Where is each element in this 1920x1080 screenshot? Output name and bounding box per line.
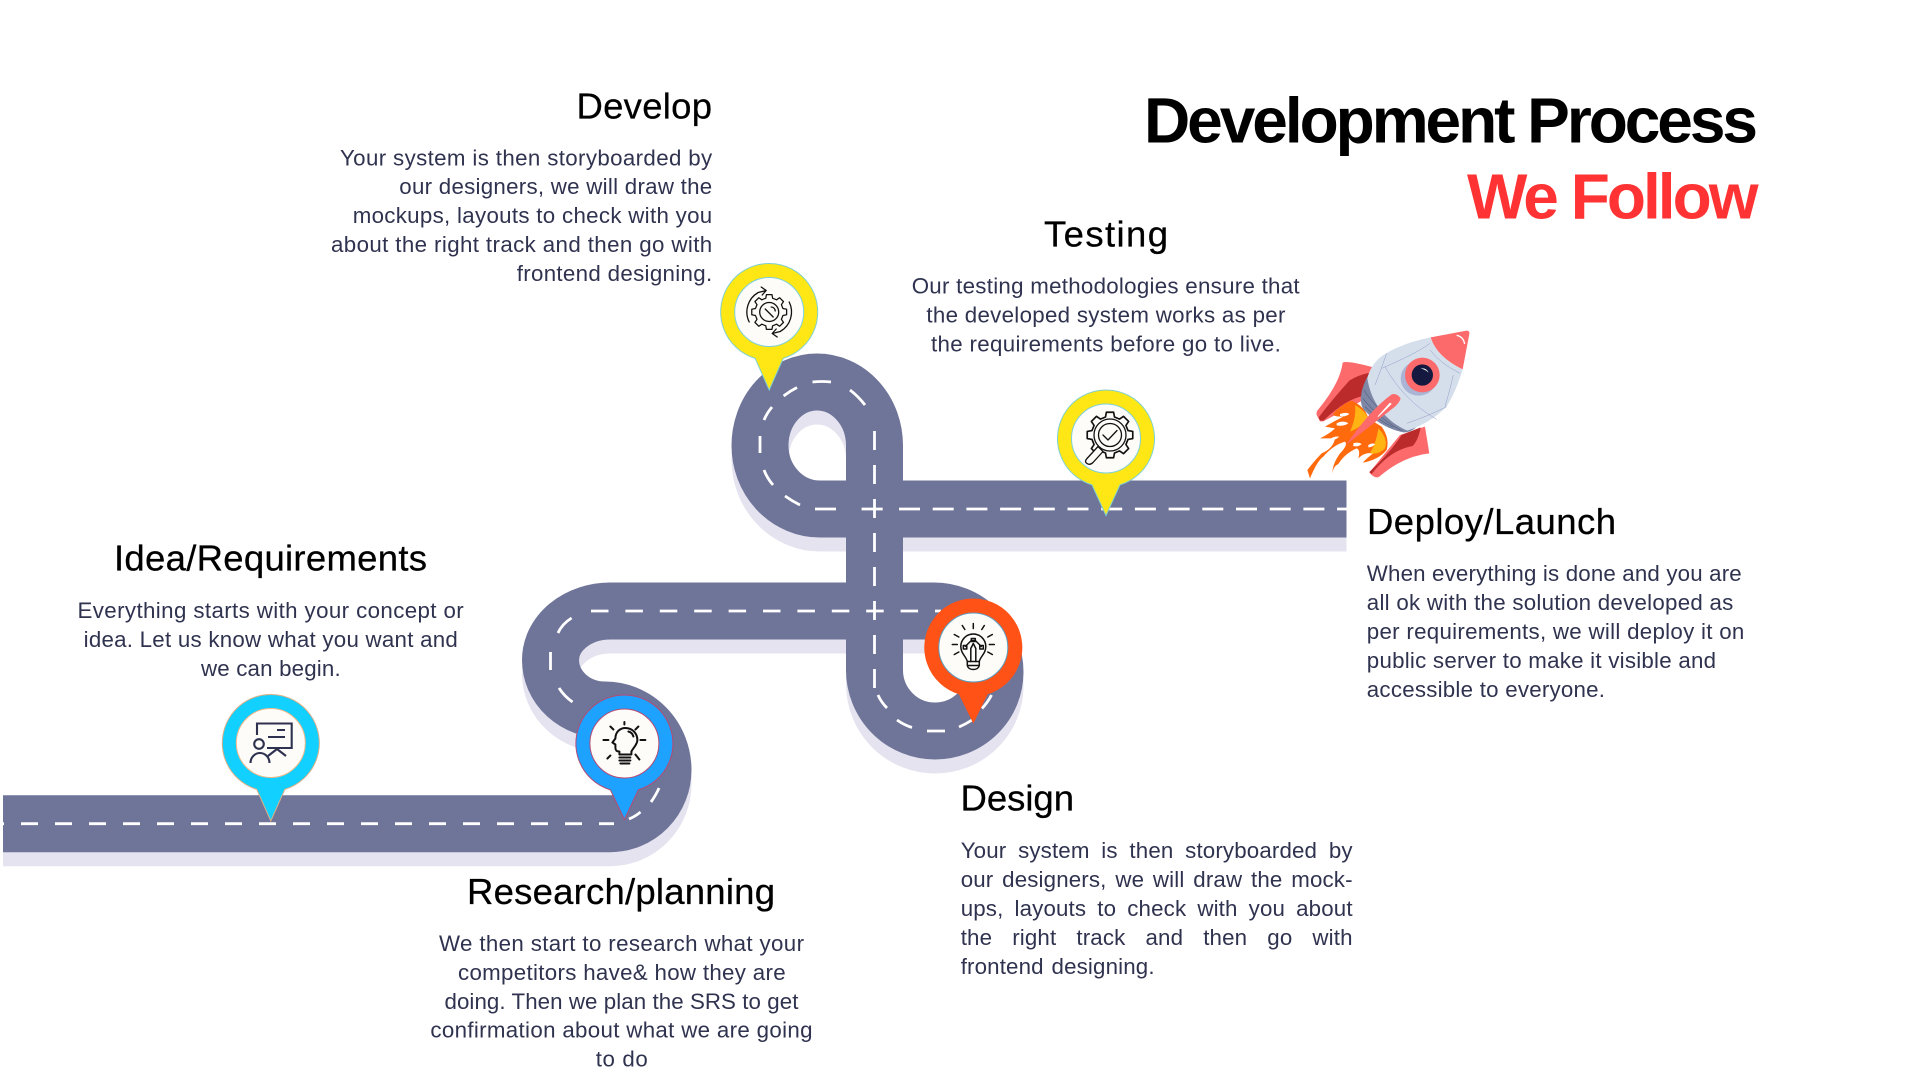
- pin: Testing: [1058, 390, 1154, 516]
- text block: Deploy/Launch: accessible to everyone.: [1367, 677, 1605, 702]
- text block: Testing: [912, 214, 1300, 356]
- text block: Design body: the right track and then go with: [961, 925, 1353, 950]
- pin: Idea: [222, 694, 319, 821]
- icon: design idea bulb: [952, 624, 994, 670]
- text block: Develop: mockups, layouts to check with you: [353, 203, 712, 228]
- text block: Design body: Your system is then storyboarded by: [961, 838, 1353, 863]
- text block: Testing: Testing: [1044, 214, 1168, 254]
- text block: Testing: the requirements before go to live.: [931, 332, 1281, 356]
- winding road: [3, 382, 1346, 824]
- text block: Idea/Requirements: we can begin.: [200, 656, 341, 681]
- text block: Design body: our designers, we will draw the mock-: [961, 867, 1353, 892]
- text block: Develop: about the right track and then go with: [331, 232, 712, 257]
- icon: presenter at board: [250, 724, 292, 763]
- text block: Develop: Develop: [576, 86, 712, 126]
- text block: Deploy/Launch: Deploy/Launch: [1367, 501, 1616, 542]
- title: We Follow: [1467, 160, 1759, 232]
- title: [1144, 85, 1759, 232]
- icon: rocket: [1307, 331, 1469, 478]
- window: [1401, 361, 1437, 396]
- flame cutouts: [1329, 413, 1375, 447]
- text block: Deploy/Launch: per requirements, we will deploy it on: [1367, 619, 1744, 644]
- road shadow: [3, 396, 1346, 838]
- icon: magnifier gear with check: [1086, 412, 1133, 464]
- pin: Develop: [721, 263, 818, 390]
- text block: Research/planning: competitors have& how they are: [458, 960, 786, 985]
- heading: Design: Design: [960, 778, 1074, 818]
- text block: Deploy/Launch: public server to make it visible and: [1367, 648, 1716, 673]
- text block: Deploy/Launch: all ok with the solution developed as: [1367, 590, 1733, 615]
- icon: gear with wrench and arrows: [747, 287, 792, 337]
- road centre dashes: [3, 382, 1346, 824]
- text block: Testing: the developed system works as per: [926, 302, 1286, 328]
- flames: [1307, 401, 1388, 478]
- text block: Deploy/Launch: When everything is done and you are: [1367, 561, 1742, 586]
- text block: Idea/Requirements: Everything starts with your concept or: [78, 598, 464, 623]
- text block: Develop: Your system is then storyboarded by: [340, 145, 713, 170]
- nose cone: [1431, 331, 1469, 369]
- text block: Idea/Requirements: idea. Let us know what you want and: [84, 627, 458, 652]
- text block: Testing: Our testing methodologies ensure that: [912, 273, 1300, 298]
- pin: Research: [576, 695, 673, 820]
- icon: head light bulb: [603, 722, 645, 764]
- text block: Research/planning: Research/planning: [467, 871, 775, 912]
- text block: Research/planning: confirmation about what we are going: [430, 1018, 812, 1043]
- left fin: [1317, 362, 1373, 421]
- text block: Research/planning: to do: [596, 1047, 648, 1072]
- text block: Design body: frontend designing.: [961, 954, 1155, 979]
- centre fin: [1346, 394, 1401, 445]
- pin: Design: [925, 599, 1022, 722]
- text block: Research/planning: doing. Then we plan the SRS to get: [444, 989, 799, 1014]
- text block: Deploy/Launch: [1367, 501, 1744, 702]
- title: Development Process: [1144, 85, 1758, 157]
- text block: Research/planning: We then start to research what your: [439, 931, 805, 956]
- text block: Idea/Requirements: Idea/Requirements: [114, 538, 427, 578]
- hull: [1367, 337, 1463, 431]
- text block: Design body: ups, layouts to check with you about: [961, 896, 1353, 921]
- text block: Develop: frontend designing.: [517, 261, 712, 286]
- text block: Develop: [331, 86, 713, 286]
- text block: Develop: our designers, we will draw the: [399, 174, 712, 199]
- text block: Idea/Requirements: [78, 538, 464, 681]
- text block: Research/planning: [430, 871, 812, 1072]
- lower fin: [1369, 427, 1429, 477]
- text block: Design body: [961, 838, 1353, 979]
- hull base: [1361, 375, 1416, 432]
